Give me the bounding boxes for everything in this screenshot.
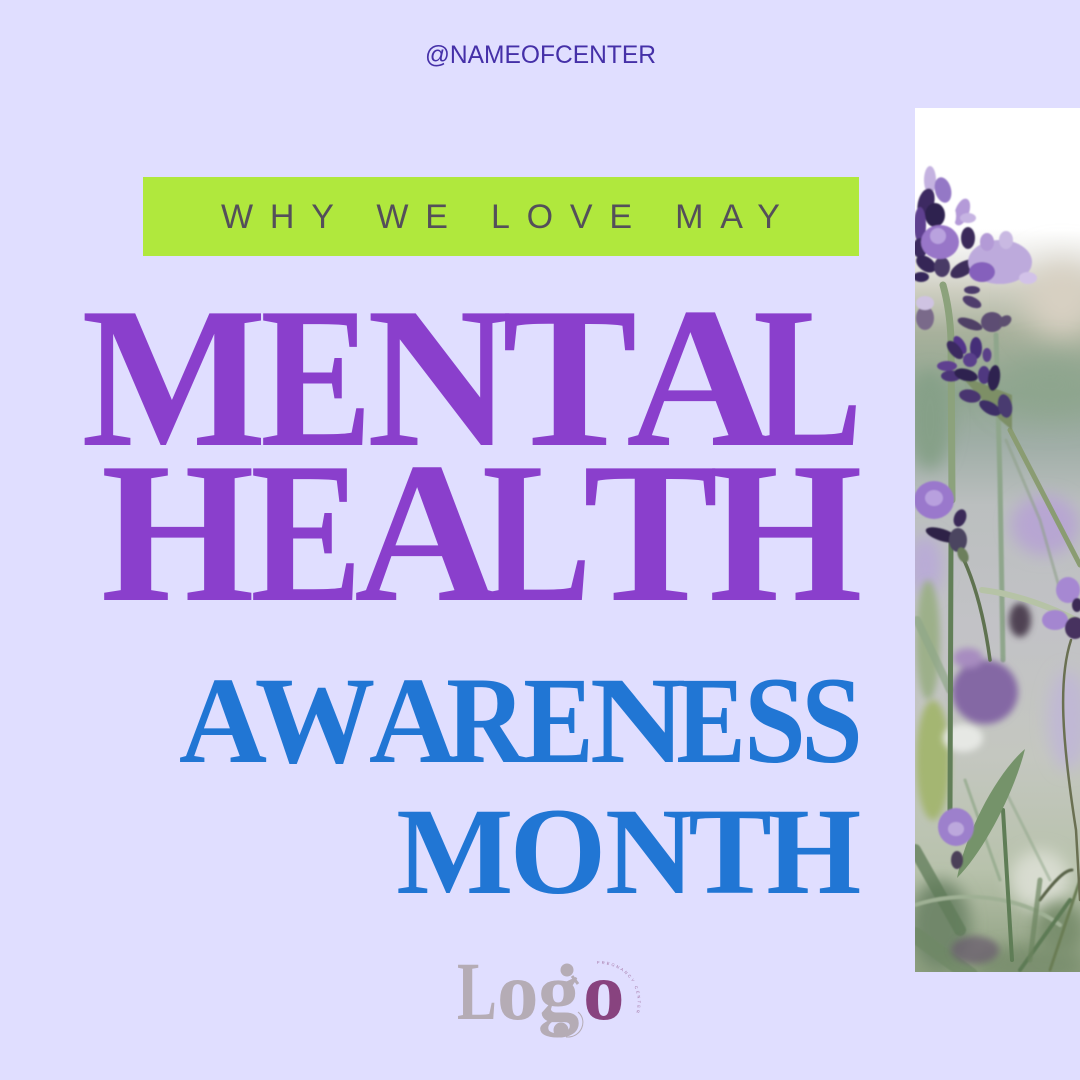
- subtitle: awareness month: N: [605, 783, 695, 920]
- title: mental health: N: [367, 267, 512, 489]
- logo: o: [583, 945, 624, 1037]
- subtitle: awareness month: H: [766, 782, 861, 920]
- subtitle: awareness month: O: [510, 783, 606, 920]
- blurred stems: [915, 335, 1080, 975]
- title: mental health: L: [753, 266, 863, 489]
- flower: second cluster: [916, 231, 1037, 333]
- subtitle: awareness month: W: [255, 652, 375, 789]
- logo: L: [457, 946, 497, 1037]
- title: mental health: A: [354, 422, 499, 644]
- handle: @NAMEOFCENTER: @NAMEOFCENTER: [425, 41, 656, 69]
- flower: lower left: [914, 481, 971, 564]
- flower: top cluster: [913, 166, 979, 282]
- subtitle: awareness month: [179, 651, 863, 920]
- subtitle: awareness month: M: [396, 783, 513, 920]
- title: mental health: H: [709, 422, 863, 644]
- title: mental health: A: [626, 266, 774, 489]
- subtitle: awareness month: T: [688, 783, 772, 920]
- photo: lavender flowers: [907, 108, 1080, 985]
- main stems: [943, 285, 1080, 960]
- title: mental health: T: [583, 421, 718, 644]
- subtitle: awareness month: R: [446, 652, 527, 789]
- flower: small bottom: [938, 808, 974, 869]
- subtitle: awareness month: S: [801, 652, 863, 789]
- title: mental health: H: [101, 422, 255, 644]
- subtitle: awareness month: S: [744, 652, 806, 789]
- flower: right edge: [1042, 577, 1080, 639]
- subtitle: awareness month: A: [179, 651, 267, 789]
- subtitle: awareness month: A: [369, 651, 457, 789]
- title: mental health: L: [482, 421, 592, 644]
- subtitle: awareness month: N: [590, 652, 686, 789]
- leaf: [957, 749, 1025, 878]
- logo: g: [538, 945, 580, 1037]
- subtitle: awareness month: E: [676, 652, 746, 789]
- title: mental health: T: [502, 266, 637, 489]
- title: mental health: E: [260, 267, 372, 489]
- title: mental health: M: [81, 266, 267, 488]
- banner: why we love may: [143, 177, 859, 256]
- lavender blurred bloom: [951, 603, 1031, 964]
- subtitle: awareness month: E: [523, 651, 594, 789]
- logo: o: [497, 945, 538, 1037]
- blurred background colours: [907, 260, 1080, 985]
- logo: tagline arc: PREGNANCY CENTER: [597, 961, 640, 1013]
- banner: why we love may: WHY WE LOVE MAY: [221, 198, 797, 236]
- title: mental health: [81, 266, 863, 644]
- logo: g ornament: [554, 964, 583, 1038]
- flower: middle buds: [937, 334, 1014, 430]
- title: mental health: E: [250, 422, 362, 644]
- logo: [457, 945, 640, 1038]
